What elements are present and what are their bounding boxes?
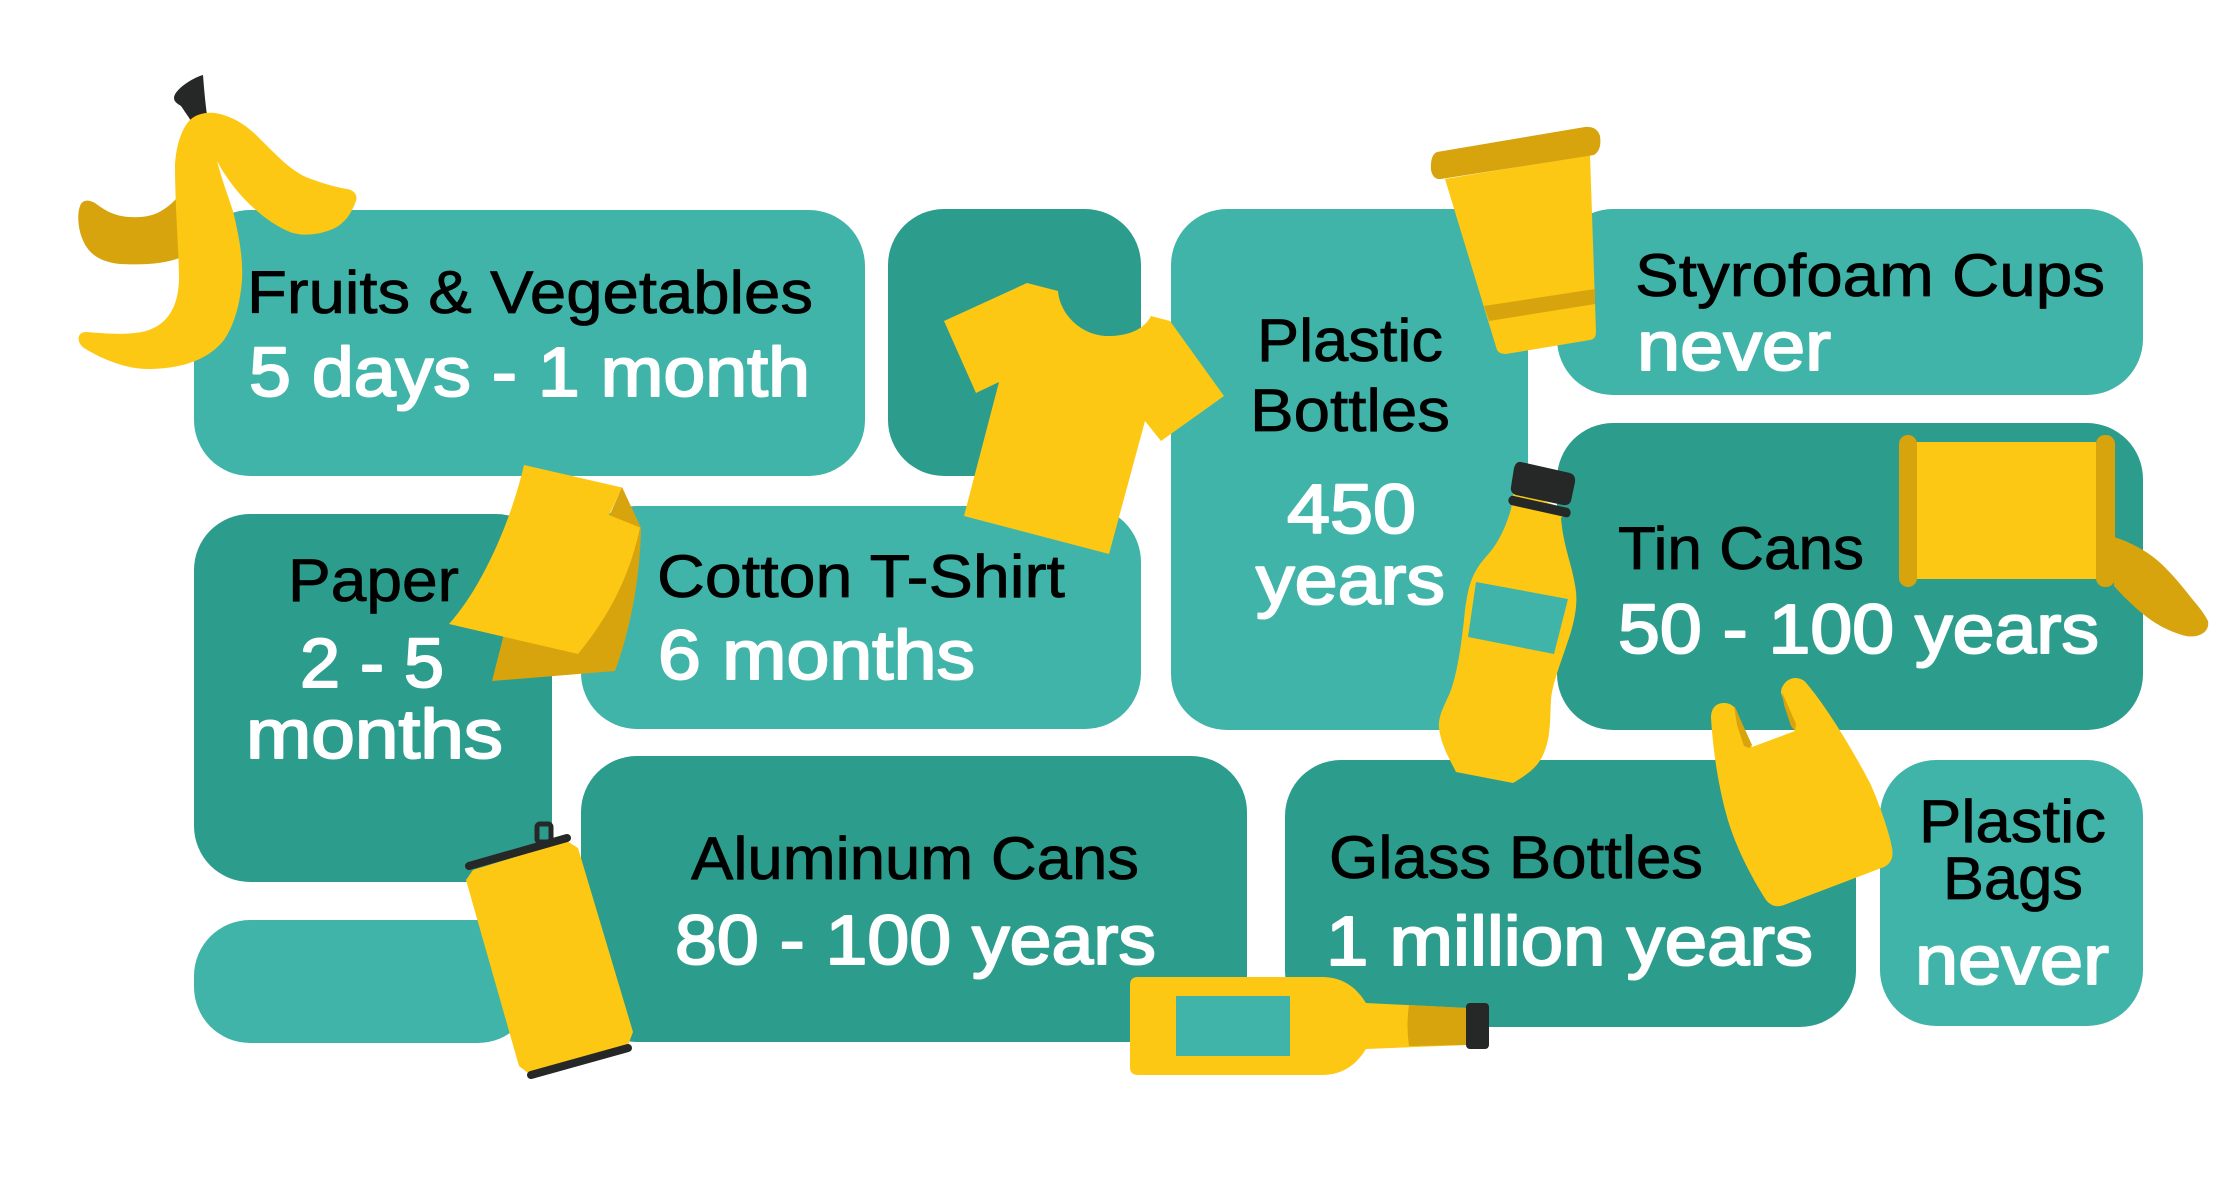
panel: fruits and vegetables <box>194 210 865 476</box>
panel: plastic bottles: Plastic <box>1257 307 1443 374</box>
panel: cotton t-shirt <box>581 506 1141 729</box>
panel: tin cans: Tin Cans <box>1618 515 1864 582</box>
panel: plastic bottles: years <box>1256 541 1445 619</box>
icon: plastic bottle <box>1439 462 1576 783</box>
panel: plastic bags <box>1880 760 2143 1026</box>
panel: glass bottles <box>1285 760 1856 1027</box>
icon: aluminum can <box>466 824 633 1075</box>
panel: aluminum cans <box>581 756 1247 1042</box>
panel: fruits and vegetables: 5 days - 1 month <box>249 333 810 411</box>
panel: aluminum cans: 80 - 100 years <box>675 901 1156 979</box>
panel: plastic bags: never <box>1915 921 2109 999</box>
icon: glass bottle <box>1130 977 1489 1075</box>
panel: cotton t-shirt: 6 months <box>658 616 975 694</box>
icon: t-shirt <box>944 283 1224 554</box>
icon: tin can with open lid <box>1899 435 2208 636</box>
panel: plastic bottles: Bottles <box>1250 377 1450 444</box>
panel: cotton t-shirt: Cotton T-Shirt <box>657 543 1065 610</box>
panel: paper: Paper <box>288 547 459 614</box>
panel: glass bottles: 1 million years <box>1326 902 1813 980</box>
panel: bottom left blank <box>194 920 534 1043</box>
icon: paper sheet <box>449 465 641 681</box>
panel: plastic bags: Bags <box>1943 845 2083 912</box>
panel: glass bottles: Glass Bottles <box>1329 824 1703 891</box>
panel: tin cans: 50 - 100 years <box>1618 590 2099 668</box>
panel: plastic bottles: 450 <box>1287 470 1416 548</box>
panel: styrofoam cups: Styrofoam Cups <box>1635 242 2105 309</box>
panel: styrofoam cups: never <box>1637 307 1831 385</box>
panel: paper: months <box>246 695 503 773</box>
icon: banana peel <box>78 75 357 369</box>
panel: plastic bags: Plastic <box>1919 788 2106 855</box>
panel: fruits and vegetables: Fruits & Vegetables <box>247 259 813 326</box>
icon: plastic bag <box>1711 678 1893 906</box>
panel: t-shirt backdrop <box>888 209 1141 476</box>
panel: styrofoam cups <box>1557 209 2143 395</box>
panel: paper: 2 - 5 <box>300 624 444 702</box>
panel: tin cans <box>1557 423 2143 730</box>
panel: aluminum cans: Aluminum Cans <box>691 825 1139 892</box>
icon: styrofoam cup <box>1431 127 1600 354</box>
panel: paper <box>194 514 552 882</box>
panel: plastic bottles <box>1171 209 1528 730</box>
